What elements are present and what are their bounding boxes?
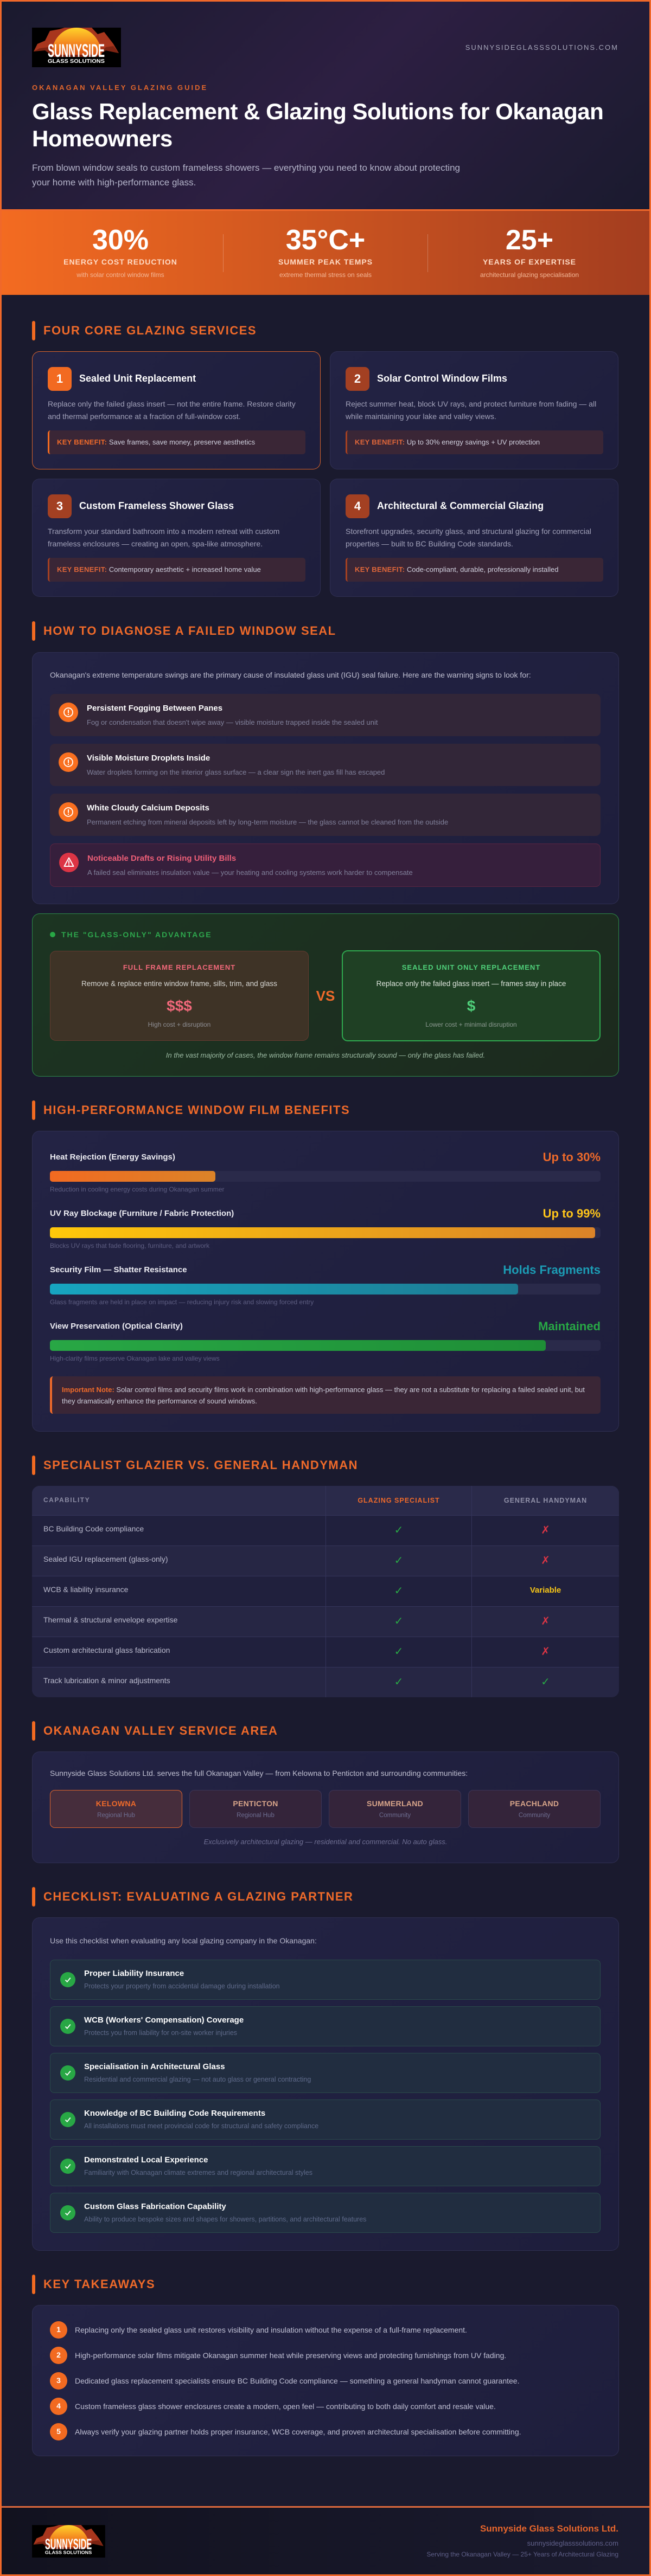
row: wcb: WCB & liability insurance: [43, 1585, 128, 1594]
bar: heat rejection: Heat Rejection (Energy Savings): [50, 1152, 175, 1162]
card: architectural & commercial glazing: Architectural & Commercial Glazing: [377, 500, 544, 511]
VS label: VS: [316, 988, 335, 1004]
warning sign: fogging: Fog or condensation that doesn't wipe away — visible moisture trapped inside the sealed unit: [87, 718, 378, 726]
heading: service area: [32, 1721, 278, 1741]
card: sealed unit replacement: Replace only the failed glass insert — not the entire frame. Restore clarity: [48, 400, 296, 408]
row: sealed igu: ✓: [394, 1554, 403, 1567]
footer company details: Sunnyside Glass Solutions Ltd.: [480, 2523, 618, 2534]
check item: wcb coverage: Protects you from liability for on-site worker injuries: [84, 2029, 237, 2037]
bar: view preservation: [50, 1319, 601, 1362]
stat: years of expertise: YEARS OF EXPERTISE: [483, 257, 576, 266]
panel heading: THE "GLASS-ONLY" ADVANTAGE: [61, 930, 212, 939]
row: sealed igu: Sealed IGU replacement (glass-only): [43, 1555, 168, 1563]
logo: Sunnyside Glass Solutions: [32, 28, 121, 67]
check item: wcb coverage: WCB (Workers' Compensation) Coverage: [84, 2015, 244, 2025]
important note: [50, 1376, 601, 1414]
important note: Important Note: Solar control films and security films work in combination with high-performance glass — they are not a substitute for replacing a failed sealed unit, but: [62, 1386, 585, 1394]
row: building code: [32, 1515, 619, 1545]
card: sealed unit replacement: and thermal performance at a fraction of full-window cost.: [48, 412, 241, 421]
takeaway 5: Always verify your glazing partner holds proper insurance, WCB coverage, and proven architectural specialisation before committing.: [75, 2427, 521, 2436]
warning sign: calcium deposits: [50, 794, 601, 836]
row: building code: ✗: [541, 1523, 550, 1536]
card: custom frameless shower glass: Transform your standard bathroom into a modern retreat with custom: [48, 527, 279, 536]
warning sign: droplets: [50, 744, 601, 786]
bar: security film: Holds Fragments: [503, 1263, 601, 1277]
row: wcb: Variable: [530, 1586, 561, 1595]
check item: fabrication: Custom Glass Fabrication Capability: [84, 2202, 226, 2211]
row: thermal: ✗: [541, 1614, 550, 1627]
table header: [32, 1486, 619, 1515]
footer logo: GLASS SOLUTIONS: [45, 2550, 92, 2555]
panel: diagnose: [32, 652, 619, 904]
row: track lubrication: [32, 1667, 619, 1697]
stat: summer peak temps: SUMMER PEAK TEMPS: [278, 257, 373, 266]
card: sealed unit replacement: 1: [56, 372, 63, 385]
warning sign: drafts and utility bills: [50, 843, 601, 887]
card: solar control window films: Solar Control Window Films: [377, 373, 507, 384]
card: solar control window films: Reject summer heat, block UV rays, and protect furniture from fading — all: [346, 400, 596, 408]
warning sign: fogging: Persistent Fogging Between Panes: [87, 704, 222, 713]
stat: energy cost reduction: ENERGY COST REDUCTION: [63, 257, 177, 266]
bar: uv ray blockage: Blocks UV rays that fade flooring, furniture, and artwork: [50, 1242, 209, 1250]
intro text: Sunnyside Glass Solutions Ltd. serves the full Okanagan Valley — from Kelowna to Penticton and surrounding communities:: [50, 1769, 468, 1778]
warning sign: fogging: [50, 694, 601, 736]
warning sign: drafts and utility bills: Noticeable Drafts or Rising Utility Bills: [87, 854, 236, 863]
title: [32, 99, 603, 151]
card: architectural & commercial glazing: Storefront upgrades, security glass, and structural glazing for commercial: [346, 527, 591, 536]
card: sealed unit replacement: KEY BENEFIT: Save frames, save money, preserve aesthetics: [57, 438, 255, 446]
stat: years of expertise: architectural glazing specialisation: [480, 271, 579, 279]
comparison: sealed unit only replacement: [342, 950, 601, 1041]
check item: building code: All installations must meet provincial code for structural and safety compliance: [84, 2122, 318, 2130]
row: fabrication: ✗: [541, 1645, 550, 1658]
takeaway 2: 2: [56, 2350, 61, 2359]
heading: checklist: CHECKLIST: EVALUATING A GLAZING PARTNER: [43, 1890, 353, 1903]
check item: specialisation: [50, 2053, 601, 2093]
comparison: full frame replacement: Remove & replace entire window frame, sills, trim, and glass: [81, 980, 277, 988]
stat: energy cost reduction: with solar control window films: [76, 271, 164, 279]
intro text: Use this checklist when evaluating any local glazing company in the Okanagan:: [50, 1936, 317, 1945]
bar: heat rejection: Up to 30%: [543, 1150, 601, 1164]
bar: uv ray blockage: UV Ray Blockage (Furniture / Fabric Protection): [50, 1209, 234, 1218]
italic note: Exclusively architectural glazing — residential and commercial. No auto glass.: [204, 1838, 447, 1846]
heading: window film benefits: [32, 1100, 350, 1120]
heading: four core glazing services: [32, 321, 257, 340]
website url: SUNNYSIDEGLASSSOLUTIONS.COM: [465, 43, 618, 51]
comparison: sealed unit only replacement: SEALED UNIT ONLY REPLACEMENT: [402, 963, 540, 971]
heading: how to diagnose: [32, 621, 336, 641]
heading: specialist vs handyman: [32, 1456, 358, 1475]
eyebrow: OKANAGAN VALLEY GLAZING GUIDE: [32, 83, 208, 92]
check item: liability insurance: Proper Liability Insurance: [84, 1969, 184, 1978]
stat: years of expertise: 25+: [506, 224, 553, 256]
stat: energy cost reduction: 30%: [92, 224, 149, 256]
footer company details: Serving the Okanagan Valley — 25+ Years of Architectural Glazing: [426, 2551, 618, 2558]
card: custom frameless shower glass: Custom Frameless Shower Glass: [79, 500, 234, 511]
row: track lubrication: ✓: [541, 1675, 550, 1688]
card: custom frameless shower glass: KEY BENEFIT: Contemporary aesthetic + increased home value: [57, 565, 261, 574]
table header: CAPABILITY: [43, 1496, 90, 1504]
city: kelowna: [50, 1790, 182, 1828]
heading: how to diagnose: HOW TO DIAGNOSE A FAILED WINDOW SEAL: [43, 624, 336, 637]
city: peachland: [468, 1790, 601, 1828]
footer company details: [426, 2523, 618, 2558]
comparison: sealed unit only replacement: Lower cost + minimal disruption: [425, 1021, 517, 1028]
takeaway 2: High-performance solar films mitigate Okanagan summer heat while preserving views and protecting furnishings from UV fading.: [75, 2351, 506, 2360]
intro text: Okanagan's extreme temperature swings are the primary cause of insulated glass unit (IGU) seal failure. Here are the warning signs to look for:: [50, 671, 531, 679]
stat: summer peak temps: 35°C+: [286, 224, 365, 256]
row: sealed igu: ✗: [541, 1554, 550, 1567]
takeaway 3: Dedicated glass replacement specialists ensure BC Building Code compliance — something a general handyman cannot guarantee.: [75, 2377, 519, 2385]
row: thermal: [32, 1606, 619, 1637]
check item: fabrication: [50, 2193, 601, 2233]
row: fabrication: ✓: [394, 1645, 403, 1658]
comparison: full frame replacement: High cost + disruption: [148, 1021, 210, 1028]
row: sealed igu: [32, 1545, 619, 1576]
bar: view preservation: Maintained: [538, 1319, 601, 1333]
heading: service area: OKANAGAN VALLEY SERVICE AREA: [43, 1724, 278, 1737]
heading: key takeaways: KEY TAKEAWAYS: [43, 2277, 155, 2291]
bar: security film: Security Film — Shatter Resistance: [50, 1265, 187, 1274]
check item: local experience: Familiarity with Okanagan climate extremes and regional architectural styles: [84, 2169, 312, 2176]
row: fabrication: [32, 1637, 619, 1667]
city: summerland: Community: [379, 1812, 411, 1819]
panel: service area: [32, 1751, 619, 1863]
card: architectural & commercial glazing: [330, 479, 618, 597]
card: solar control window films: 2: [354, 372, 361, 385]
footer company details: sunnysideglasssolutions.com: [527, 2539, 618, 2547]
card: sealed unit replacement: [32, 351, 321, 469]
card: solar control window films: KEY BENEFIT: Up to 30% energy savings + UV protection: [355, 438, 540, 446]
panel: key takeaways: [32, 2305, 619, 2456]
check item: specialisation: Specialisation in Architectural Glass: [84, 2062, 225, 2071]
warning sign: droplets: Visible Moisture Droplets Inside: [87, 754, 210, 763]
card: custom frameless shower glass: frameless enclosures — creating an open, spa-like atmosphere.: [48, 539, 263, 548]
subtitle: your home with high-performance glass.: [32, 177, 196, 188]
footer: [2, 2506, 649, 2574]
check item: wcb coverage: [50, 2006, 601, 2046]
row: thermal: Thermal & structural envelope expertise: [43, 1615, 177, 1624]
check item: fabrication: Ability to produce bespoke sizes and shapes for showers, partitions, and architectural features: [84, 2216, 366, 2223]
comparison: sealed unit only replacement: Replace only the failed glass insert — frames stay in place: [376, 980, 566, 988]
warning sign: calcium deposits: Permanent etching from mineral deposits left by long-term moisture — the glass cannot be cleaned from the outside: [87, 818, 448, 826]
check item: local experience: Demonstrated Local Experience: [84, 2155, 208, 2165]
check item: specialisation: Residential and commercial glazing — not auto glass or general contracting: [84, 2076, 311, 2083]
comparison: sealed unit only replacement: $: [467, 997, 475, 1014]
warning sign: drafts and utility bills: A failed seal eliminates insulation value — your heating and cooling systems work harder to compensate: [87, 868, 413, 877]
stat: summer peak temps: [278, 224, 373, 279]
comparison table: [32, 1486, 619, 1697]
bar: view preservation: High-clarity films preserve Okanagan lake and valley views: [50, 1355, 220, 1362]
row: fabrication: Custom architectural glass fabrication: [43, 1646, 170, 1654]
takeaway 5: 5: [56, 2427, 61, 2436]
city: penticton: PENTICTON: [233, 1799, 278, 1808]
title: Glass Replacement & Glazing Solutions for Okanagan: [32, 99, 603, 124]
takeaway 2: [50, 2347, 506, 2364]
conclusion note: In the vast majority of cases, the window frame remains structurally sound — only the glass has failed.: [166, 1051, 485, 1059]
card: architectural & commercial glazing: 4: [354, 499, 361, 513]
bar: security film: [50, 1263, 601, 1306]
heading: checklist: [32, 1887, 353, 1907]
heading: specialist vs handyman: SPECIALIST GLAZIER VS. GENERAL HANDYMAN: [43, 1458, 358, 1472]
takeaway 4: [50, 2398, 496, 2415]
card: sealed unit replacement: Sealed Unit Replacement: [79, 373, 196, 384]
bar: view preservation: View Preservation (Optical Clarity): [50, 1322, 183, 1331]
city: peachland: PEACHLAND: [510, 1799, 559, 1808]
card: solar control window films: while maintaining your lake and valley views.: [346, 412, 496, 421]
check item: building code: [50, 2100, 601, 2140]
comparison: full frame replacement: $$$: [167, 997, 192, 1014]
table header: GLAZING SPECIALIST: [358, 1497, 440, 1504]
warning sign: droplets: Water droplets forming on the interior glass surface — a clear sign the inert gas fill has escaped: [87, 768, 385, 776]
panel: checklist: [32, 1917, 619, 2251]
bar: uv ray blockage: Up to 99%: [543, 1207, 601, 1220]
takeaway 1: Replacing only the sealed glass unit restores visibility and insulation without the expense of a full-frame replacement.: [75, 2326, 467, 2334]
stat: energy cost reduction: [63, 224, 177, 279]
stats band: [2, 211, 649, 295]
takeaway 4: Custom frameless glass shower enclosures create a modern, open feel — contributing to both daily comfort and resale value.: [75, 2402, 496, 2411]
heading: four core glazing services: FOUR CORE GLAZING SERVICES: [43, 324, 257, 337]
takeaway 5: [50, 2423, 521, 2440]
panel: glass-only advantage: [32, 913, 619, 1077]
row: wcb: ✓: [394, 1584, 403, 1597]
card: custom frameless shower glass: 3: [56, 499, 63, 513]
takeaway 1: [50, 2321, 467, 2339]
check item: liability insurance: [50, 1960, 601, 2000]
important note: they dramatically enhance the performance of sound windows.: [62, 1397, 257, 1405]
subtitle: [32, 163, 460, 188]
bar: uv ray blockage: [50, 1207, 601, 1250]
row: track lubrication: ✓: [394, 1675, 403, 1688]
card: custom frameless shower glass: [32, 479, 321, 597]
city: summerland: [329, 1790, 461, 1828]
stat: years of expertise: [480, 224, 579, 279]
header: [2, 2, 649, 211]
card: architectural & commercial glazing: properties — built to BC Building Code standards.: [346, 539, 513, 548]
row: track lubrication: Track lubrication & minor adjustments: [43, 1676, 170, 1685]
takeaway 3: 3: [56, 2376, 61, 2385]
bar: security film: Glass fragments are held in place on impact — reducing injury risk and slowing forced entry: [50, 1298, 314, 1306]
city: kelowna: Regional Hub: [97, 1812, 135, 1819]
row: building code: ✓: [394, 1523, 403, 1536]
row: building code: BC Building Code compliance: [43, 1524, 144, 1533]
card: solar control window films: [330, 351, 618, 469]
heading: window film benefits: HIGH-PERFORMANCE WINDOW FILM BENEFITS: [43, 1103, 350, 1117]
takeaway 1: 1: [56, 2325, 61, 2334]
check item: liability insurance: Protects your property from accidental damage during installation: [84, 1982, 280, 1990]
bar: heat rejection: [50, 1150, 601, 1193]
city: kelowna: KELOWNA: [96, 1799, 136, 1808]
heading: key takeaways: [32, 2275, 155, 2294]
bar: heat rejection: Reduction in cooling energy costs during Okanagan summer: [50, 1186, 225, 1193]
subtitle: From blown window seals to custom frameless showers — everything you need to know about protecting: [32, 163, 460, 173]
city: peachland: Community: [519, 1812, 550, 1819]
check item: building code: Knowledge of BC Building Code Requirements: [84, 2109, 265, 2118]
comparison: full frame replacement: [50, 951, 309, 1041]
panel: window film benefits: [32, 1131, 619, 1432]
title: Homeowners: [32, 126, 173, 151]
city: penticton: [189, 1790, 322, 1828]
footer logo: [32, 2525, 105, 2558]
takeaway 3: [50, 2372, 519, 2390]
table header: GENERAL HANDYMAN: [504, 1497, 587, 1504]
row: wcb: [32, 1576, 619, 1606]
row: thermal: ✓: [394, 1614, 403, 1627]
check item: local experience: [50, 2146, 601, 2186]
takeaway 4: 4: [56, 2401, 61, 2410]
card: architectural & commercial glazing: KEY BENEFIT: Code-compliant, durable, professionally installed: [355, 565, 558, 574]
stat: summer peak temps: extreme thermal stress on seals: [279, 271, 372, 279]
logo: Sunnyside Glass Solutions: GLASS SOLUTIONS: [48, 59, 105, 65]
city: penticton: Regional Hub: [237, 1812, 275, 1819]
city: summerland: SUMMERLAND: [367, 1799, 423, 1808]
comparison: full frame replacement: FULL FRAME REPLACEMENT: [123, 963, 235, 971]
warning sign: calcium deposits: White Cloudy Calcium Deposits: [87, 803, 209, 813]
